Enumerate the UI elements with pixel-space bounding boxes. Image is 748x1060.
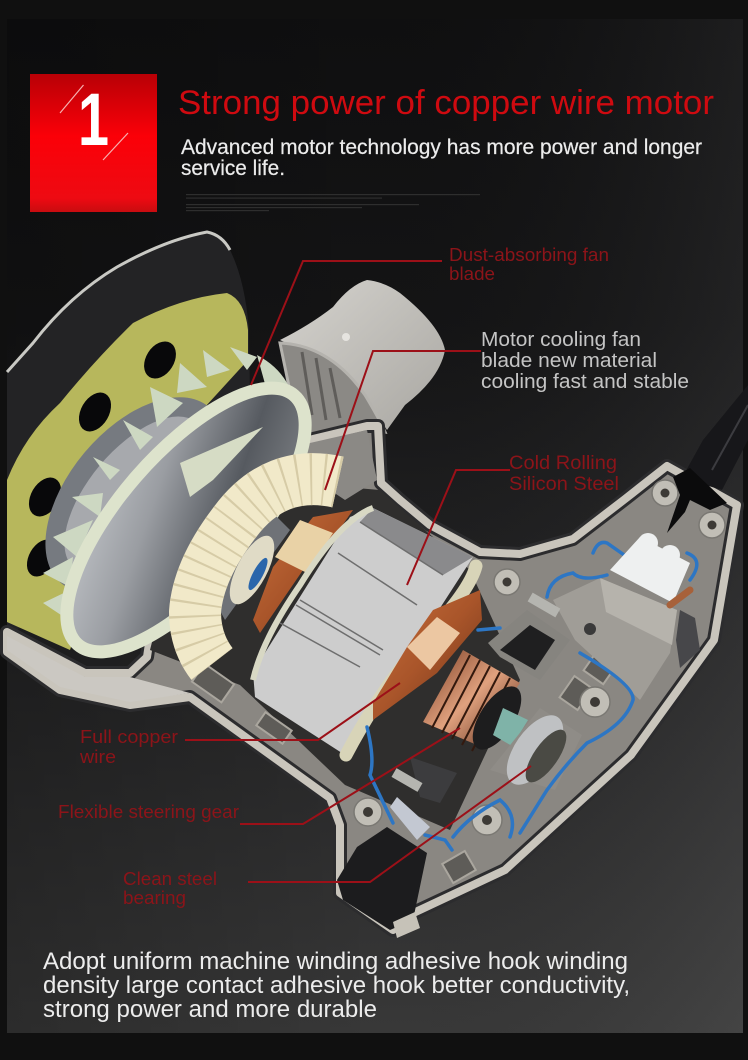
- fan window: [180, 427, 263, 497]
- subtitle: [181, 136, 702, 180]
- brush holder bottom: [410, 757, 457, 803]
- terminal block: [610, 533, 690, 603]
- title: Strong power of copper wire motor: [178, 84, 714, 122]
- fan ring and metal plate: [28, 352, 344, 688]
- rear copper coil: [253, 510, 353, 633]
- callout: clean steel bearing: bearing: [123, 887, 186, 908]
- callout: full copper wire: Full copper: [80, 726, 178, 747]
- switch compartment wall: [600, 578, 677, 645]
- callout: cold rolling silicon steel: [407, 452, 619, 585]
- stator left ring: [253, 508, 373, 680]
- callout: full copper wire: wire: [79, 746, 116, 767]
- power cable: [667, 385, 748, 533]
- housing compartment ribs: [192, 646, 620, 883]
- switch compartment floor: [553, 578, 677, 700]
- motor shaft: [190, 490, 290, 620]
- front copper coil: [373, 590, 482, 720]
- terminal clips: [392, 593, 560, 792]
- floor shadow under motor: [150, 480, 520, 830]
- subtitle: Advanced motor technology has more power and longer: [181, 136, 702, 159]
- badge accent strokes: [60, 85, 128, 160]
- sanding pad: [7, 232, 250, 650]
- callout: motor cooling fan blade: blade new material: [481, 350, 657, 372]
- faint fine print: [186, 194, 480, 211]
- blue wires: [367, 542, 697, 850]
- fan hub: [11, 364, 259, 626]
- green shaft: [493, 708, 528, 746]
- housing foot: [7, 636, 190, 702]
- subtitle: service life.: [181, 157, 285, 180]
- bottom description: density large contact adhesive hook better conductivity,: [43, 972, 630, 999]
- callout: dust-absorbing fan blade: Dust-absorbing fan: [449, 244, 609, 265]
- dust tube: [280, 280, 445, 440]
- callout: dust-absorbing fan blade: blade: [449, 263, 495, 284]
- bottom description: strong power and more durable: [43, 996, 377, 1023]
- pad holes: [21, 336, 182, 582]
- callout: motor cooling fan blade: Motor cooling fan: [481, 329, 641, 351]
- cooling fan: [11, 347, 344, 688]
- stator end ring: [346, 566, 476, 755]
- callout: cold rolling silicon steel: Cold Rolling: [509, 452, 617, 474]
- ball bearing: [490, 706, 582, 794]
- number badge: [30, 74, 157, 212]
- stator core: [253, 508, 476, 755]
- screw posts: [145, 480, 725, 835]
- fan blades: [43, 347, 297, 623]
- badge number: 1: [78, 78, 109, 161]
- callout: cold rolling silicon steel: Silicon Steel: [509, 473, 619, 495]
- brush holder top: [488, 610, 570, 680]
- callout: full copper wire: [79, 683, 400, 767]
- black switch block: [337, 827, 427, 930]
- callout: clean steel bearing: Clean steel: [123, 868, 217, 889]
- bottom description: [43, 948, 630, 1023]
- housing shell: [7, 426, 737, 930]
- side grip: [676, 610, 700, 668]
- callout: motor cooling fan blade: cooling fast and stable: [481, 371, 689, 393]
- housing bottom tip: [393, 912, 420, 938]
- callout: flexible steering gear: [58, 728, 460, 824]
- bottom description: Adopt uniform machine winding adhesive hook winding: [43, 948, 628, 975]
- callout: flexible steering gear: Flexible steering gear: [58, 801, 239, 822]
- callout: clean steel bearing: [123, 766, 531, 908]
- commutator: [423, 650, 531, 757]
- callout: dust-absorbing fan blade: [251, 244, 609, 385]
- gear hub: [221, 529, 283, 611]
- product photo: sander cutaway: [7, 232, 748, 938]
- bevel gear: [195, 479, 338, 664]
- callout: motor cooling fan blade: [325, 329, 689, 490]
- copper lead: [670, 590, 690, 605]
- upper housing floor: [288, 430, 377, 500]
- capacitor: [390, 797, 430, 840]
